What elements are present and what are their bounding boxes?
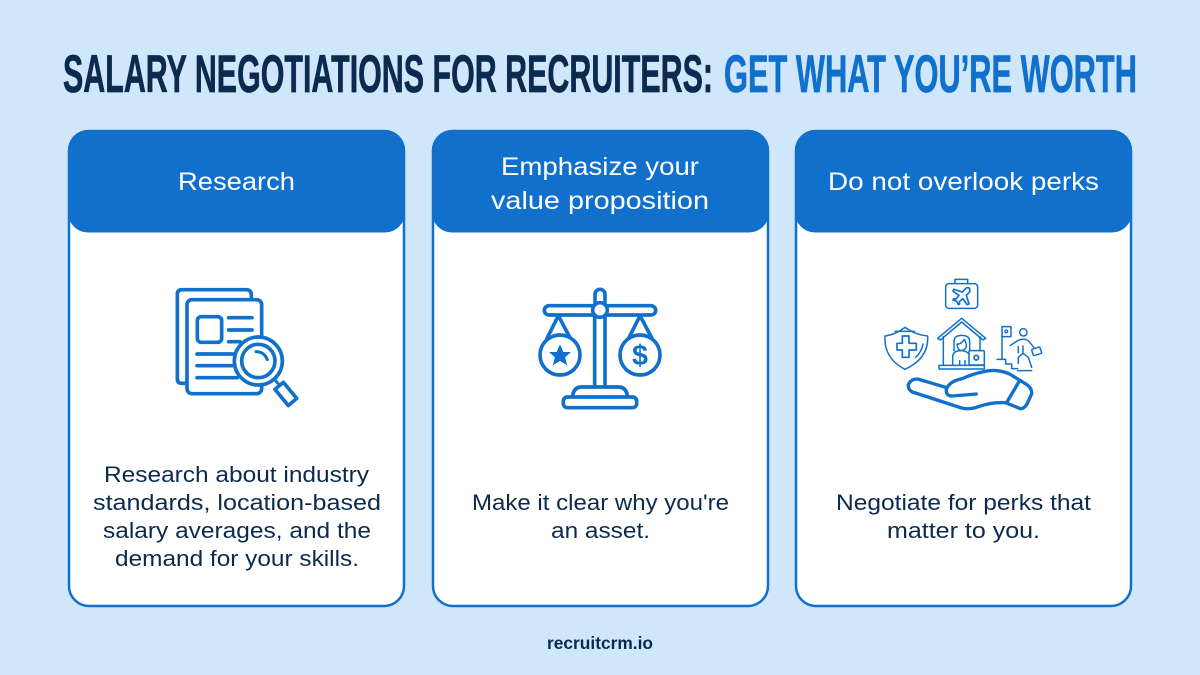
body text: value proposition	[472, 490, 729, 543]
icon: balance scale	[540, 289, 660, 408]
panel: perks	[795, 130, 1132, 606]
body text: research: Research about industry	[104, 462, 369, 487]
heading: perks: Do not overlook perks	[828, 168, 1099, 196]
body text: research	[93, 462, 381, 571]
icon: health shield	[885, 327, 928, 369]
panel: research	[68, 130, 405, 606]
body text: research: demand for your skills.	[115, 546, 359, 571]
heading: value proposition: value proposition	[491, 187, 709, 215]
heading: research	[68, 130, 405, 232]
icon: balance scale: $	[632, 340, 648, 372]
icon: perks on open hand	[885, 279, 1042, 409]
body text: perks: Negotiate for perks that	[836, 490, 1091, 515]
panel: value proposition	[432, 130, 769, 606]
body text: perks: matter to you.	[887, 518, 1040, 543]
body text: value proposition: Make it clear why you're	[472, 490, 729, 515]
heading: perks	[795, 130, 1132, 232]
icon: open hand	[908, 370, 1032, 409]
icon: climbing career stairs	[997, 327, 1042, 371]
body text: perks	[836, 490, 1091, 543]
footer source: recruitcrm.io	[547, 633, 653, 653]
body text: research: standards, location-based	[93, 490, 381, 515]
heading: research: Research	[178, 168, 295, 196]
icon: house with remote worker	[938, 318, 986, 369]
heading: value proposition	[432, 130, 769, 232]
title: SALARY NEGOTIATIONS FOR RECRUITERS:	[63, 45, 713, 104]
heading: value proposition: Emphasize your	[501, 153, 699, 181]
body text: research: salary averages, and the	[103, 518, 371, 543]
body text: value proposition: an asset.	[551, 518, 650, 543]
icon: suitcase with plane	[946, 279, 978, 308]
icon: documents with magnifying glass	[177, 290, 297, 406]
